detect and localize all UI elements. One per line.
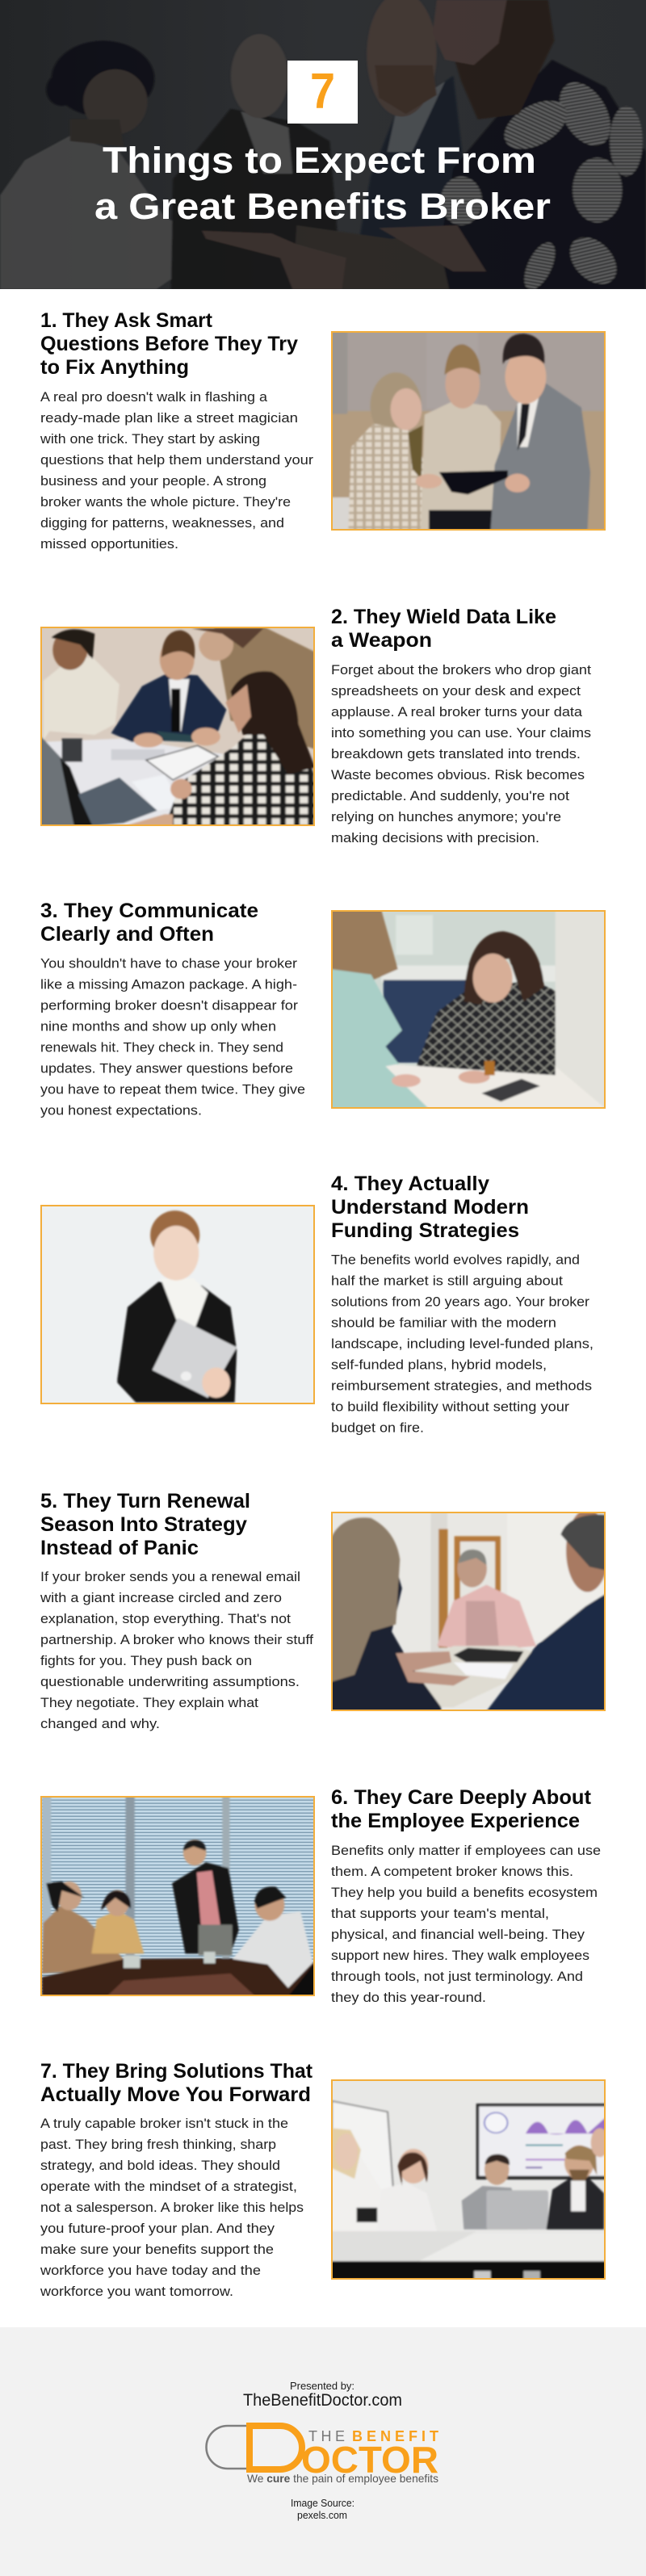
heading 3 bbox=[40, 900, 258, 946]
panel: section 3 bbox=[40, 900, 606, 1118]
title: a Great Benefits Broker bbox=[94, 186, 551, 227]
number badge: 7 bbox=[310, 64, 335, 120]
body text 5: with a giant increase circled and zero bbox=[40, 1591, 282, 1605]
photo 5: meeting across a table bbox=[331, 1509, 609, 1711]
photo 2: team reviewing documents bbox=[40, 627, 315, 826]
body text 7 bbox=[40, 2117, 304, 2299]
body text 4: budget on fire. bbox=[331, 1421, 424, 1436]
presented by text: Presented by: bbox=[290, 2380, 354, 2392]
body text 3: You shouldn't have to chase your broker bbox=[40, 956, 298, 971]
body text 4: solutions from 20 years ago. Your broker bbox=[331, 1295, 590, 1310]
body text 7: not a salesperson. A broker like this helps bbox=[40, 2201, 304, 2215]
body text 1: questions that help them understand your bbox=[40, 453, 314, 468]
body text 1: missed opportunities. bbox=[40, 537, 178, 552]
body text 1 bbox=[40, 390, 314, 552]
body text 5: They negotiate. They explain what bbox=[40, 1696, 258, 1710]
body text 4 bbox=[331, 1253, 594, 1436]
body text 7: A truly capable broker isn't stuck in the bbox=[40, 2117, 288, 2131]
body text 6: Benefits only matter if employees can use bbox=[331, 1844, 601, 1858]
heading 4: Understand Modern bbox=[331, 1196, 529, 1219]
body text 2: spreadsheets on your desk and expect bbox=[331, 684, 581, 699]
title: Things to Expect From bbox=[103, 140, 536, 181]
heading 5 bbox=[40, 1490, 250, 1559]
photo 6: boardroom with blinds bbox=[40, 1796, 315, 1996]
body text 2: relying on hunches anymore; you're bbox=[331, 810, 561, 824]
panel: footer bbox=[0, 2327, 646, 2576]
body text 3 bbox=[40, 956, 305, 1118]
panel: section 5 bbox=[40, 1490, 609, 1731]
body text 7: workforce you want tomorrow. bbox=[40, 2284, 233, 2299]
image source text bbox=[291, 2497, 354, 2521]
bearded man centre bbox=[350, 76, 478, 289]
body text 2: into something you can use. Your claims bbox=[331, 726, 591, 740]
heading 1: to Fix Anything bbox=[40, 356, 189, 379]
bald man bbox=[171, 108, 342, 289]
photo 3: woman at desk with calculator bbox=[331, 910, 606, 1109]
heading 7 bbox=[40, 2060, 313, 2106]
body text 2: Waste becomes obvious. Risk becomes bbox=[331, 768, 585, 782]
heading 5: Season Into Strategy bbox=[40, 1513, 247, 1536]
heading 6: 6. They Care Deeply About bbox=[331, 1786, 592, 1809]
panel: section 2 bbox=[40, 606, 591, 845]
panel: section 1 bbox=[40, 309, 606, 552]
body text 2: applause. A real broker turns your data bbox=[331, 705, 583, 720]
body text 1: broker wants the whole picture. They're bbox=[40, 495, 291, 510]
hands and tablet bbox=[292, 225, 449, 289]
body text 4: landscape, including level-funded plans, bbox=[331, 1337, 594, 1352]
heading 6: the Employee Experience bbox=[331, 1810, 580, 1832]
body text 7: make sure your benefits support the bbox=[40, 2242, 274, 2257]
heading 1: 1. They Ask Smart bbox=[40, 309, 213, 332]
heading 4 bbox=[331, 1173, 529, 1242]
body text 3: renewals hit. They check in. They send bbox=[40, 1040, 283, 1055]
body text 2: predictable. And suddenly, you're not bbox=[331, 789, 569, 803]
logo: The Benefit Doctor bbox=[207, 2426, 438, 2485]
body text 5: explanation, stop everything. That's not bbox=[40, 1612, 291, 1626]
body text 7: workforce you have today and the bbox=[40, 2263, 261, 2278]
body text 1: A real pro doesn't walk in flashing a bbox=[40, 390, 268, 405]
body text 6: they do this year-round. bbox=[331, 1991, 486, 2005]
body text 6: physical, and financial well-being. They bbox=[331, 1928, 585, 1942]
body text 6: them. A competent broker knows this. bbox=[331, 1865, 573, 1879]
body text 5: changed and why. bbox=[40, 1717, 160, 1731]
body text 6: through tools, not just terminology. And bbox=[331, 1970, 583, 1984]
body text 3: you have to repeat them twice. They give bbox=[40, 1082, 305, 1097]
body text 2: making decisions with precision. bbox=[331, 831, 539, 845]
body text 1: with one trick. They start by asking bbox=[40, 432, 260, 447]
body text 3: nine months and show up only when bbox=[40, 1019, 276, 1034]
body text 6: They help you build a benefits ecosystem bbox=[331, 1886, 598, 1900]
body text 5: If your broker sends you a renewal email bbox=[40, 1570, 300, 1584]
panel: header bbox=[0, 0, 646, 292]
body text 5 bbox=[40, 1570, 313, 1731]
image source text: Image Source: bbox=[291, 2497, 354, 2509]
body text 2: Forget about the brokers who drop giant bbox=[331, 663, 591, 678]
body text 4: to build flexibility without setting your bbox=[331, 1400, 570, 1415]
body text 6: that supports your team's mental, bbox=[331, 1907, 549, 1921]
panel: section 4 bbox=[40, 1173, 594, 1436]
body text 1: ready-made plan like a street magician bbox=[40, 411, 298, 426]
body text 3: updates. They answer questions before bbox=[40, 1061, 293, 1076]
heading 2: 2. They Wield Data Like bbox=[331, 606, 556, 628]
body text 6 bbox=[331, 1844, 601, 2005]
header photo: four colleagues, darkened bbox=[0, 0, 646, 289]
photo 1: three colleagues with tablet bbox=[331, 331, 606, 531]
heading 7: Actually Move You Forward bbox=[40, 2083, 311, 2106]
body text 3: you honest expectations. bbox=[40, 1103, 202, 1118]
heading 2: a Weapon bbox=[331, 629, 432, 652]
logo: The Benefit Doctor: THE bbox=[308, 2428, 345, 2444]
heading 4: 4. They Actually bbox=[331, 1173, 489, 1195]
right man bbox=[433, 60, 646, 289]
panel: section 6 bbox=[40, 1786, 601, 2005]
body text 4: half the market is still arguing about bbox=[331, 1274, 563, 1289]
heading 3: Clearly and Often bbox=[40, 923, 214, 946]
heading 3: 3. They Communicate bbox=[40, 900, 258, 922]
body text 4: reimbursement strategies, and methods bbox=[331, 1379, 592, 1394]
body text 7: past. They bring fresh thinking, sharp bbox=[40, 2138, 276, 2152]
body text 5: questionable underwriting assumptions. bbox=[40, 1675, 300, 1689]
presented by text bbox=[243, 2380, 402, 2410]
photo 4: businesswoman holding laptop bbox=[40, 1205, 315, 1404]
body text 6: support new hires. They walk employees bbox=[331, 1949, 589, 1963]
body text 7: you future-proof your plan. And they bbox=[40, 2221, 275, 2236]
body text 4: self-funded plans, hybrid models, bbox=[331, 1358, 547, 1373]
heading 4: Funding Strategies bbox=[331, 1219, 519, 1242]
heading 1: Questions Before They Try bbox=[40, 333, 298, 355]
body text 7: operate with the mindset of a strategist, bbox=[40, 2180, 297, 2194]
body text 2: breakdown gets translated into trends. bbox=[331, 747, 581, 761]
heading 6 bbox=[331, 1786, 592, 1832]
body text 5: partnership. A broker who knows their stuff bbox=[40, 1633, 313, 1647]
photo 7: presentation meeting with screen bbox=[331, 2079, 609, 2280]
body text 7: strategy, and bold ideas. They should bbox=[40, 2159, 280, 2173]
heading 2 bbox=[331, 606, 556, 652]
logo: The Benefit Doctor: BENEFIT bbox=[352, 2428, 438, 2444]
title bbox=[94, 140, 551, 227]
number badge bbox=[287, 61, 358, 124]
heading 7: 7. They Bring Solutions That bbox=[40, 2060, 313, 2083]
heading 1 bbox=[40, 309, 298, 379]
body text 4: should be familiar with the modern bbox=[331, 1316, 556, 1331]
logo: The Benefit Doctor: We cure the pain of employee benefits bbox=[247, 2472, 438, 2485]
image source text: pexels.com bbox=[297, 2509, 347, 2521]
woman bbox=[0, 136, 280, 289]
body text 5: fights for you. They push back on bbox=[40, 1654, 252, 1668]
heading 5: 5. They Turn Renewal bbox=[40, 1490, 250, 1512]
heading 5: Instead of Panic bbox=[40, 1537, 199, 1559]
panel: section 7 bbox=[40, 2060, 609, 2299]
body text 3: performing broker doesn't disappear for bbox=[40, 998, 299, 1013]
logo: The Benefit Doctor: OCTOR bbox=[301, 2439, 438, 2481]
presented by text: TheBenefitDoctor.com bbox=[243, 2391, 402, 2410]
body text 1: business and your people. A strong bbox=[40, 474, 266, 489]
body text 1: digging for patterns, weaknesses, and bbox=[40, 516, 284, 531]
body text 2 bbox=[331, 663, 591, 845]
body text 4: The benefits world evolves rapidly, and bbox=[331, 1253, 580, 1268]
body text 3: like a missing Amazon package. A high- bbox=[40, 977, 297, 992]
